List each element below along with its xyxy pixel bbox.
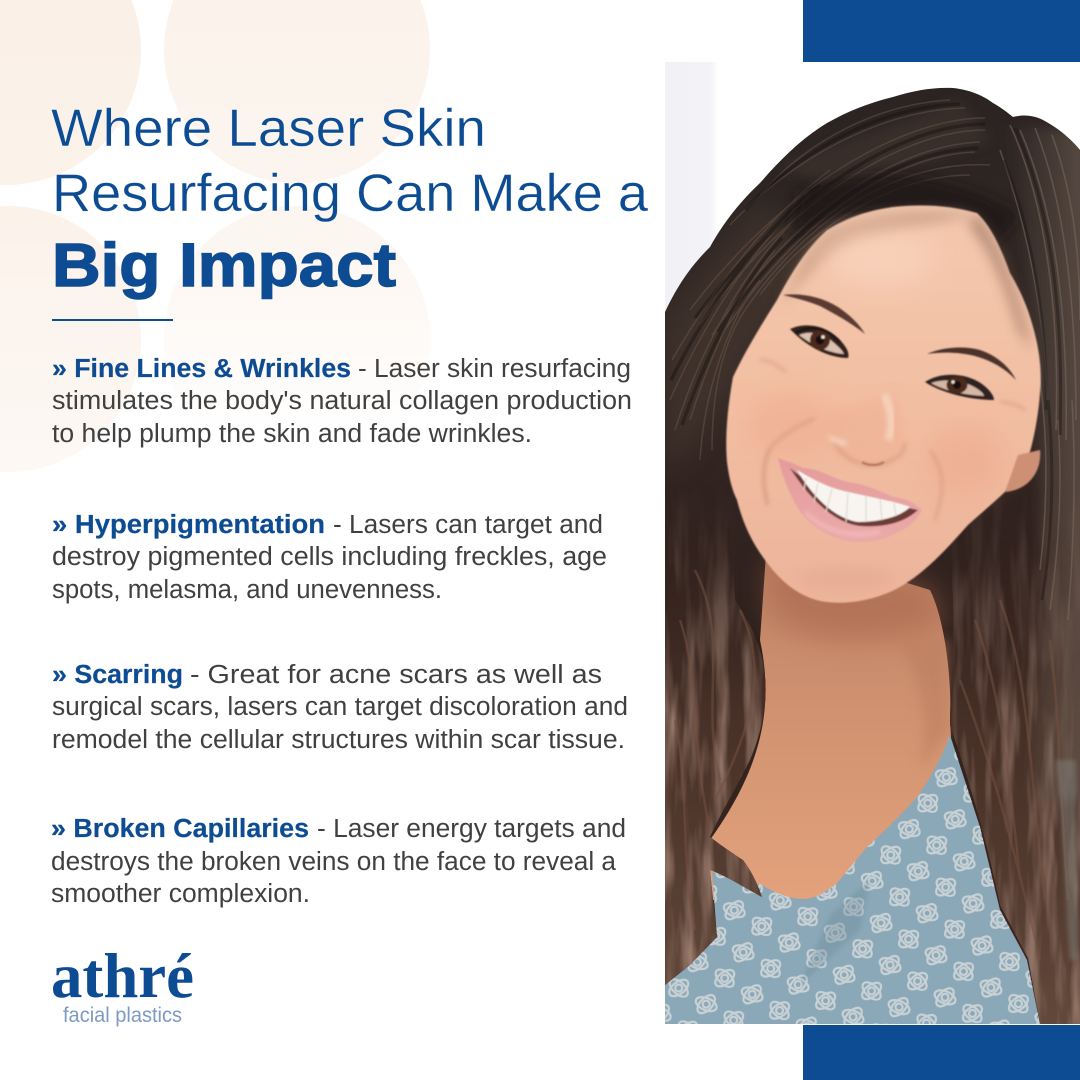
blue block: top right: [803, 0, 1080, 62]
text block: broken capillaries: [51, 815, 626, 908]
text block: scarring: remodel the cellular structures within scar tissue.: [52, 726, 625, 754]
title: [51, 99, 649, 299]
decorative peach circles: [0, 0, 430, 472]
logo: athré facial plastics: facial plastics: [63, 1004, 182, 1027]
text block: hyperpigmentation: [52, 511, 607, 604]
text block: broken capillaries: smoother complexion.: [51, 880, 310, 908]
text block: broken capillaries: » Broken Capillaries: [51, 815, 309, 843]
text block: scarring: surgical scars, lasers can target discoloration and: [52, 693, 628, 721]
title: Where Laser Skin: [51, 99, 486, 158]
text block: fine lines and wrinkles: stimulates the body's natural collagen production: [52, 387, 632, 415]
text block: hyperpigmentation: - Lasers can target and: [333, 511, 603, 539]
text block: hyperpigmentation: spots, melasma, and unevenness.: [52, 576, 442, 604]
text block: broken capillaries: - Laser energy targets and: [317, 815, 626, 843]
title divider rule: [52, 319, 173, 321]
text block: scarring: [52, 661, 628, 754]
blue block: bottom right: [803, 1025, 1080, 1080]
photo: smiling woman: [665, 62, 1080, 1024]
text block: fine lines and wrinkles: [52, 355, 632, 448]
logo: athré facial plastics: athré: [51, 941, 194, 1011]
text block: fine lines and wrinkles: - Laser skin resurfacing: [358, 355, 631, 383]
title: Resurfacing Can Make a: [52, 164, 649, 223]
text block: hyperpigmentation: destroy pigmented cells including freckles, age: [52, 543, 607, 571]
title: Big Impact: [52, 231, 396, 299]
text block: scarring: - Great for acne scars as well as: [190, 661, 602, 689]
text block: scarring: » Scarring: [52, 661, 183, 689]
text block: broken capillaries: destroys the broken veins on the face to reveal a: [51, 848, 617, 876]
text block: hyperpigmentation: » Hyperpigmentation: [52, 511, 325, 539]
text block: fine lines and wrinkles: » Fine Lines & Wrinkles: [52, 355, 351, 383]
text block: fine lines and wrinkles: to help plump the skin and fade wrinkles.: [52, 420, 532, 448]
